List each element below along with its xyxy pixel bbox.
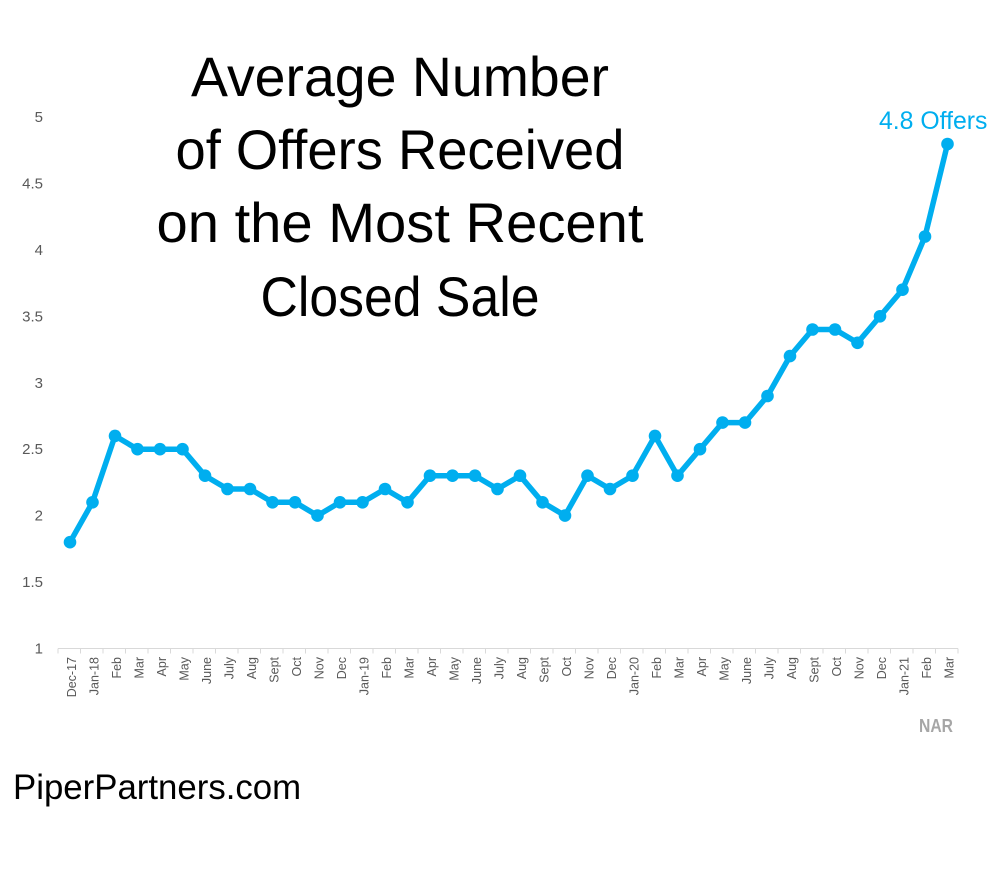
- title: Closed Sale: [260, 265, 540, 328]
- title: of Offers Received: [176, 118, 624, 181]
- x axis labels: Aug: [785, 657, 799, 679]
- x axis labels: Nov: [582, 656, 596, 679]
- y axis labels: 3: [35, 375, 43, 392]
- x axis labels: Jan-20: [627, 657, 641, 695]
- x axis labels: July: [222, 656, 236, 679]
- title: Average Number: [191, 45, 609, 108]
- x axis labels: Feb: [650, 657, 664, 679]
- x axis labels: Jan-21: [897, 657, 911, 695]
- x axis labels: Nov: [312, 656, 326, 679]
- x axis labels: Dec-17: [65, 657, 79, 697]
- x axis labels: May: [717, 656, 731, 681]
- title: on the Most Recent: [156, 191, 644, 254]
- x axis labels: Feb: [920, 657, 934, 679]
- x axis labels: July: [492, 656, 506, 679]
- x axis labels: Feb: [380, 657, 394, 679]
- x axis labels: June: [740, 657, 754, 684]
- source: NAR: NAR: [919, 716, 953, 736]
- x axis labels: Feb: [110, 657, 124, 679]
- x axis labels: Jan-18: [87, 657, 101, 695]
- y axis labels: 1: [35, 640, 43, 658]
- x axis labels: Oct: [290, 656, 304, 676]
- x axis labels: June: [470, 657, 484, 684]
- x axis labels: Apr: [155, 657, 169, 676]
- website footer: PiperPartners.com: [13, 768, 301, 807]
- x axis labels: Nov: [852, 656, 866, 679]
- x axis labels: Mar: [672, 657, 686, 679]
- x axis labels: Apr: [695, 657, 709, 676]
- x axis labels: Oct: [560, 656, 574, 676]
- x axis labels: May: [447, 656, 461, 681]
- y axis labels: 3.5: [22, 308, 43, 326]
- y axis labels: 2: [35, 508, 43, 524]
- line chart: average number of offers: [64, 138, 954, 548]
- y axis labels: 1.5: [22, 574, 43, 591]
- x axis labels: Sept: [807, 656, 821, 683]
- y axis labels: 4: [35, 242, 43, 259]
- x axis labels: Oct: [830, 656, 844, 676]
- x axis labels: Dec: [605, 657, 619, 679]
- x axis line and ticks: [58, 648, 958, 654]
- x axis labels: Mar: [132, 657, 146, 679]
- x axis labels: June: [200, 657, 214, 684]
- y axis labels: [22, 109, 43, 658]
- x axis labels: May: [177, 656, 191, 681]
- y axis labels: 2.5: [22, 441, 43, 458]
- x axis labels: Mar: [402, 657, 416, 679]
- x axis labels: Sept: [537, 656, 551, 683]
- x axis labels: Aug: [245, 657, 259, 679]
- y axis labels: 4.5: [22, 176, 43, 192]
- x axis labels: Dec: [875, 657, 889, 679]
- x axis labels: Dec: [335, 657, 349, 679]
- x axis labels: July: [762, 656, 776, 679]
- callout: 4.8 offers: 4.8 Offers: [879, 108, 987, 135]
- y axis labels: 5: [35, 109, 43, 126]
- x axis labels: Sept: [267, 656, 281, 683]
- x axis labels: Apr: [425, 657, 439, 676]
- title: [156, 45, 644, 328]
- x axis labels: Aug: [515, 657, 529, 679]
- x axis labels: Mar: [942, 657, 956, 679]
- x axis labels: Jan-19: [357, 657, 371, 695]
- x axis labels: [65, 656, 956, 697]
